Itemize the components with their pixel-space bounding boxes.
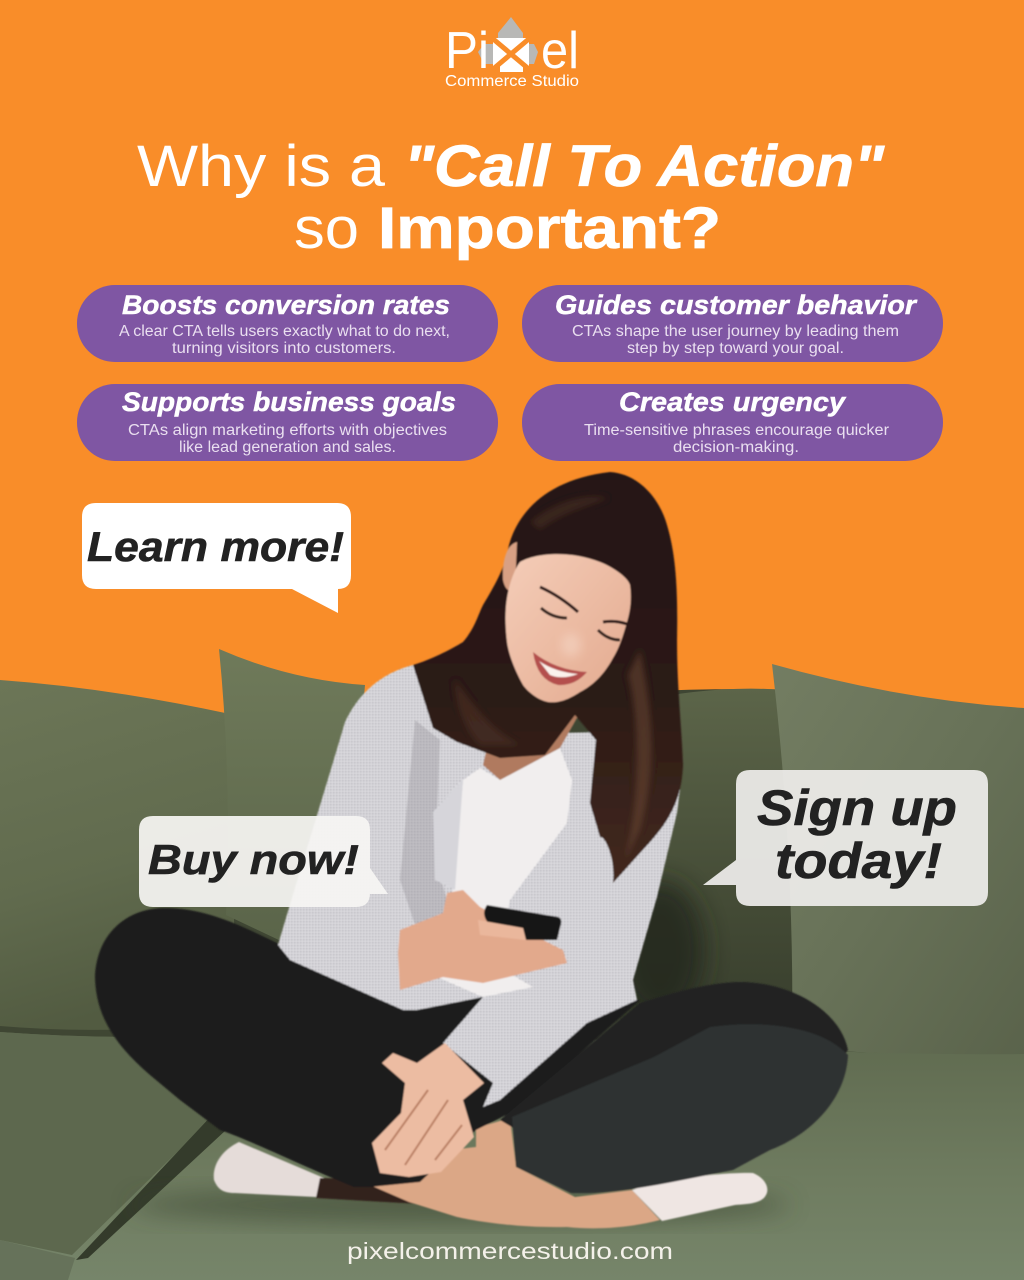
seat — [0, 1032, 1024, 1280]
right leg thigh — [500, 982, 848, 1180]
upper hand — [398, 890, 567, 990]
ear — [503, 542, 517, 591]
title — [137, 134, 886, 261]
lips — [533, 652, 587, 685]
shirt — [278, 665, 680, 1107]
title: so — [294, 196, 359, 261]
panel: boosts conversion rates — [77, 285, 498, 362]
speech bubble: buy now: Buy now! — [148, 836, 359, 883]
title: "Call To Action" — [404, 134, 886, 199]
panel: boosts conversion rates: Boosts conversion rates — [122, 290, 450, 320]
lower hand — [372, 1043, 484, 1177]
title: Important? — [378, 196, 721, 261]
panel: supports business goals: Supports business goals — [122, 387, 456, 417]
panel: guides customer behavior: step by step toward your goal. — [627, 340, 844, 357]
phone — [484, 905, 561, 940]
dark ankle — [316, 1178, 420, 1204]
brows — [540, 587, 627, 624]
dark seat gap — [76, 1112, 226, 1260]
shirt shading — [400, 720, 450, 925]
neck — [483, 690, 590, 780]
lower hand finger gaps — [385, 1090, 462, 1165]
logo wordmark: Commerce Studio — [445, 73, 579, 90]
logo wordmark: el — [541, 22, 579, 80]
speech bubble: sign up today — [703, 770, 988, 906]
white tee — [437, 748, 572, 997]
bare leg and foot — [370, 1118, 660, 1228]
speech bubble: learn more: Learn more! — [87, 523, 344, 570]
panel: supports business goals: CTAs align marketing efforts with objectives — [128, 422, 447, 439]
speech bubble: buy now — [139, 816, 388, 907]
left seat cushion — [0, 1032, 215, 1255]
eyes — [541, 608, 620, 640]
icon: logo arrows — [478, 17, 538, 72]
lapel left — [433, 760, 480, 890]
speech bubble: learn more — [82, 503, 351, 613]
panel: guides customer behavior: CTAs shape the user journey by leading them — [572, 323, 899, 340]
right large cushion — [772, 664, 1024, 1056]
title: Why is a — [137, 134, 386, 199]
logo wordmark — [445, 22, 579, 90]
panel: supports business goals — [77, 384, 498, 461]
hair highlights — [625, 650, 652, 860]
panel: boosts conversion rates: A clear CTA tells users exactly what to do next, — [119, 323, 450, 340]
left leg jeans — [95, 908, 640, 1187]
footer url: pixelcommercestudio.com — [347, 1238, 673, 1264]
sofa — [0, 649, 1024, 1280]
panel: creates urgency — [522, 384, 943, 461]
fingers on phone — [478, 920, 526, 940]
panel: guides customer behavior: Guides customer behavior — [555, 290, 918, 320]
speech bubble: sign up today: Sign up — [757, 780, 957, 836]
right leg shin — [512, 1024, 848, 1193]
face — [506, 554, 631, 702]
panel: supports business goals: like lead generation and sales. — [179, 439, 396, 456]
logo — [445, 17, 579, 90]
middle back cushion — [620, 689, 800, 1060]
nose highlight — [561, 633, 581, 657]
panel: creates urgency: Time-sensitive phrases encourage quicker — [584, 422, 889, 439]
woman — [95, 472, 848, 1228]
hair — [413, 472, 683, 883]
teeth — [539, 661, 578, 677]
panel: creates urgency: decision-making. — [673, 439, 799, 456]
panel: guides customer behavior — [522, 285, 943, 362]
left large cushion — [0, 680, 236, 1030]
logo wordmark: Pi — [445, 22, 489, 80]
panel: boosts conversion rates: turning visitors into customers. — [172, 340, 396, 357]
left upright cushion — [219, 649, 365, 950]
speech bubble: sign up today: today! — [775, 833, 942, 889]
left sock — [214, 1142, 324, 1197]
right sock — [632, 1173, 767, 1221]
dark base fill — [0, 689, 1024, 1280]
panel: creates urgency: Creates urgency — [619, 387, 847, 417]
